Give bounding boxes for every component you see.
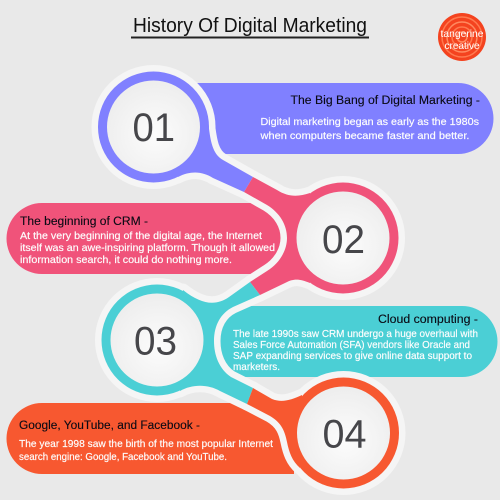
panel: Google, YouTube, and Facebook: search engine: Google, Facebook and YouTube. (19, 451, 227, 463)
logo: tangerine creative: creative (444, 40, 480, 52)
panel: Cloud computing: Sales Force Automation (SFA) vendors like Oracle and (233, 339, 470, 351)
panel: The beginning of CRM: itself was an awe-inspiring platform. Though it allowed (20, 242, 275, 254)
panel: Cloud computing (205, 306, 497, 377)
panel: The Big Bang of Digital Marketing: Digital marketing began as early as the 1980s (260, 116, 479, 128)
panel: The beginning of CRM (6, 203, 296, 274)
panel: Cloud computing: marketers. (233, 361, 280, 373)
node 02: red ring and connector: 02 (322, 218, 365, 262)
logo: tangerine creative (438, 13, 486, 61)
node 03: teal ring and connector: 03 (134, 320, 177, 364)
panel: Cloud computing: Cloud computing - (378, 314, 478, 326)
panel: Google, YouTube, and Facebook: Google, YouTube, and Facebook - (19, 420, 200, 432)
panel: The Big Bang of Digital Marketing (190, 83, 493, 154)
panel: Cloud computing: The late 1990s saw CRM undergo a huge overhaul with (233, 328, 478, 340)
panel: Google, YouTube, and Facebook (6, 403, 294, 474)
node 01: purple ring and connector (98, 72, 253, 192)
panel: The beginning of CRM: information search, it could do nothing more. (20, 254, 232, 266)
panel: The beginning of CRM: The beginning of CRM - (20, 216, 148, 228)
node 04: orange ring and connector (247, 378, 399, 488)
panel: The Big Bang of Digital Marketing: The Big Bang of Digital Marketing - (290, 95, 480, 107)
node 01: purple ring and connector: 01 (132, 106, 175, 150)
panel: Google, YouTube, and Facebook: The year 1998 saw the birth of the most popular Internet (19, 438, 273, 450)
panel: The Big Bang of Digital Marketing: when computers became faster and better. (259, 130, 470, 142)
node 03: teal ring and connector (102, 282, 260, 404)
logo: tangerine creative: tangerine (440, 28, 484, 40)
node 04: orange ring and connector: 04 (322, 412, 366, 456)
panel: The beginning of CRM: At the very beginning of the digital age, the Internet (20, 230, 262, 242)
panel: Cloud computing: SAP expanding services to give online data support to (233, 350, 472, 362)
node 02: red ring and connector (244, 177, 398, 295)
title: History Of Digital Marketing (133, 15, 367, 37)
serpentine halo outline (98, 72, 399, 488)
